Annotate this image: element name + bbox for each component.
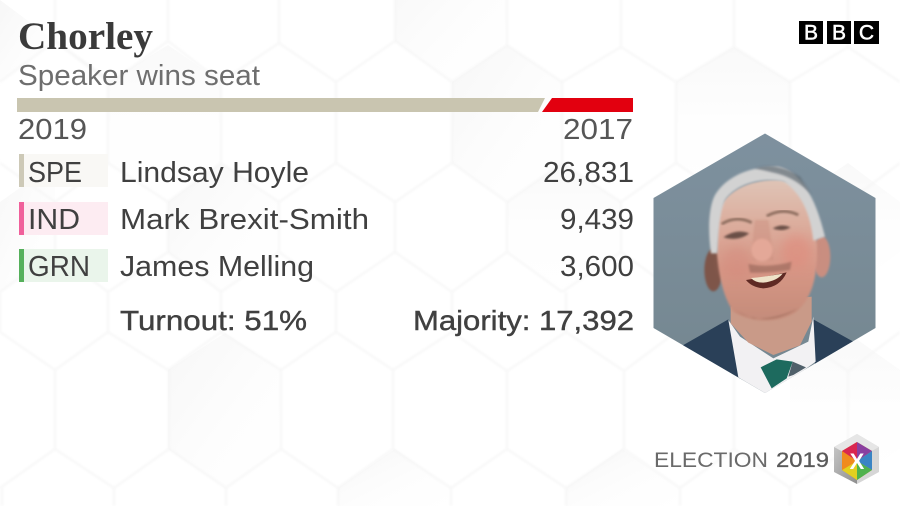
party chip: IND: IND bbox=[28, 204, 80, 236]
candidate name: James Melling bbox=[120, 251, 314, 283]
ear left bbox=[704, 249, 722, 291]
cheek flush right bbox=[784, 236, 810, 262]
year label: 2017: 2017 bbox=[563, 114, 633, 146]
chin shadow bbox=[765, 311, 792, 320]
votes: 3,600 bbox=[560, 251, 634, 283]
BBC logo: B bbox=[804, 22, 818, 44]
BBC logo bbox=[799, 21, 879, 44]
bar: 2019 winner, Speaker bbox=[17, 98, 545, 112]
party chip: GRN: GRN bbox=[28, 251, 90, 283]
suit bbox=[683, 320, 853, 380]
majority: Majority: 17,392 bbox=[413, 305, 634, 336]
title: Chorley bbox=[18, 15, 154, 58]
ear right bbox=[813, 236, 830, 277]
face bbox=[717, 180, 817, 321]
BBC logo: C bbox=[859, 22, 874, 44]
party chip: SPE: SPE bbox=[28, 157, 82, 189]
year label: 2019: 2019 bbox=[18, 114, 87, 146]
seat change bar bbox=[17, 98, 633, 112]
brow left bbox=[722, 219, 752, 224]
eye right bbox=[773, 226, 791, 230]
candidate name: Mark Brexit-Smith bbox=[120, 204, 369, 236]
result row: Speaker bbox=[19, 154, 634, 189]
bar: 2017 winner, Labour bbox=[542, 98, 633, 112]
portrait: Lindsay Hoyle bbox=[650, 130, 880, 407]
party chip: GRN bbox=[19, 249, 108, 283]
nose shadow bbox=[754, 220, 770, 241]
label: ELECTION bbox=[654, 449, 768, 472]
result row: Independent bbox=[19, 202, 634, 236]
mouth bbox=[746, 272, 787, 288]
candidate name: Lindsay Hoyle bbox=[120, 157, 309, 189]
icon: election cube with X bbox=[834, 434, 879, 484]
brow right bbox=[767, 211, 798, 216]
party chip: SPE bbox=[19, 154, 108, 189]
cheek flush left bbox=[730, 250, 743, 262]
Election 2019 branding: 2019 bbox=[776, 449, 829, 472]
eye left bbox=[723, 232, 749, 239]
nose bbox=[751, 239, 773, 261]
shirt bbox=[728, 317, 816, 395]
result row: Green bbox=[19, 249, 634, 283]
icon: election cube with X: X bbox=[850, 449, 865, 474]
subtitle: Speaker wins seat bbox=[18, 60, 260, 92]
shadow under nose bbox=[748, 262, 792, 273]
turnout: Turnout: 51% bbox=[120, 305, 307, 336]
BBC logo: B bbox=[832, 22, 846, 44]
votes: 26,831 bbox=[543, 157, 634, 189]
hair bbox=[709, 167, 825, 253]
neck bbox=[731, 297, 812, 355]
Election 2019 branding bbox=[654, 434, 879, 484]
votes: 9,439 bbox=[560, 204, 634, 236]
party chip: IND bbox=[19, 202, 108, 236]
hair shadow bbox=[755, 166, 812, 195]
tie bbox=[761, 359, 793, 388]
